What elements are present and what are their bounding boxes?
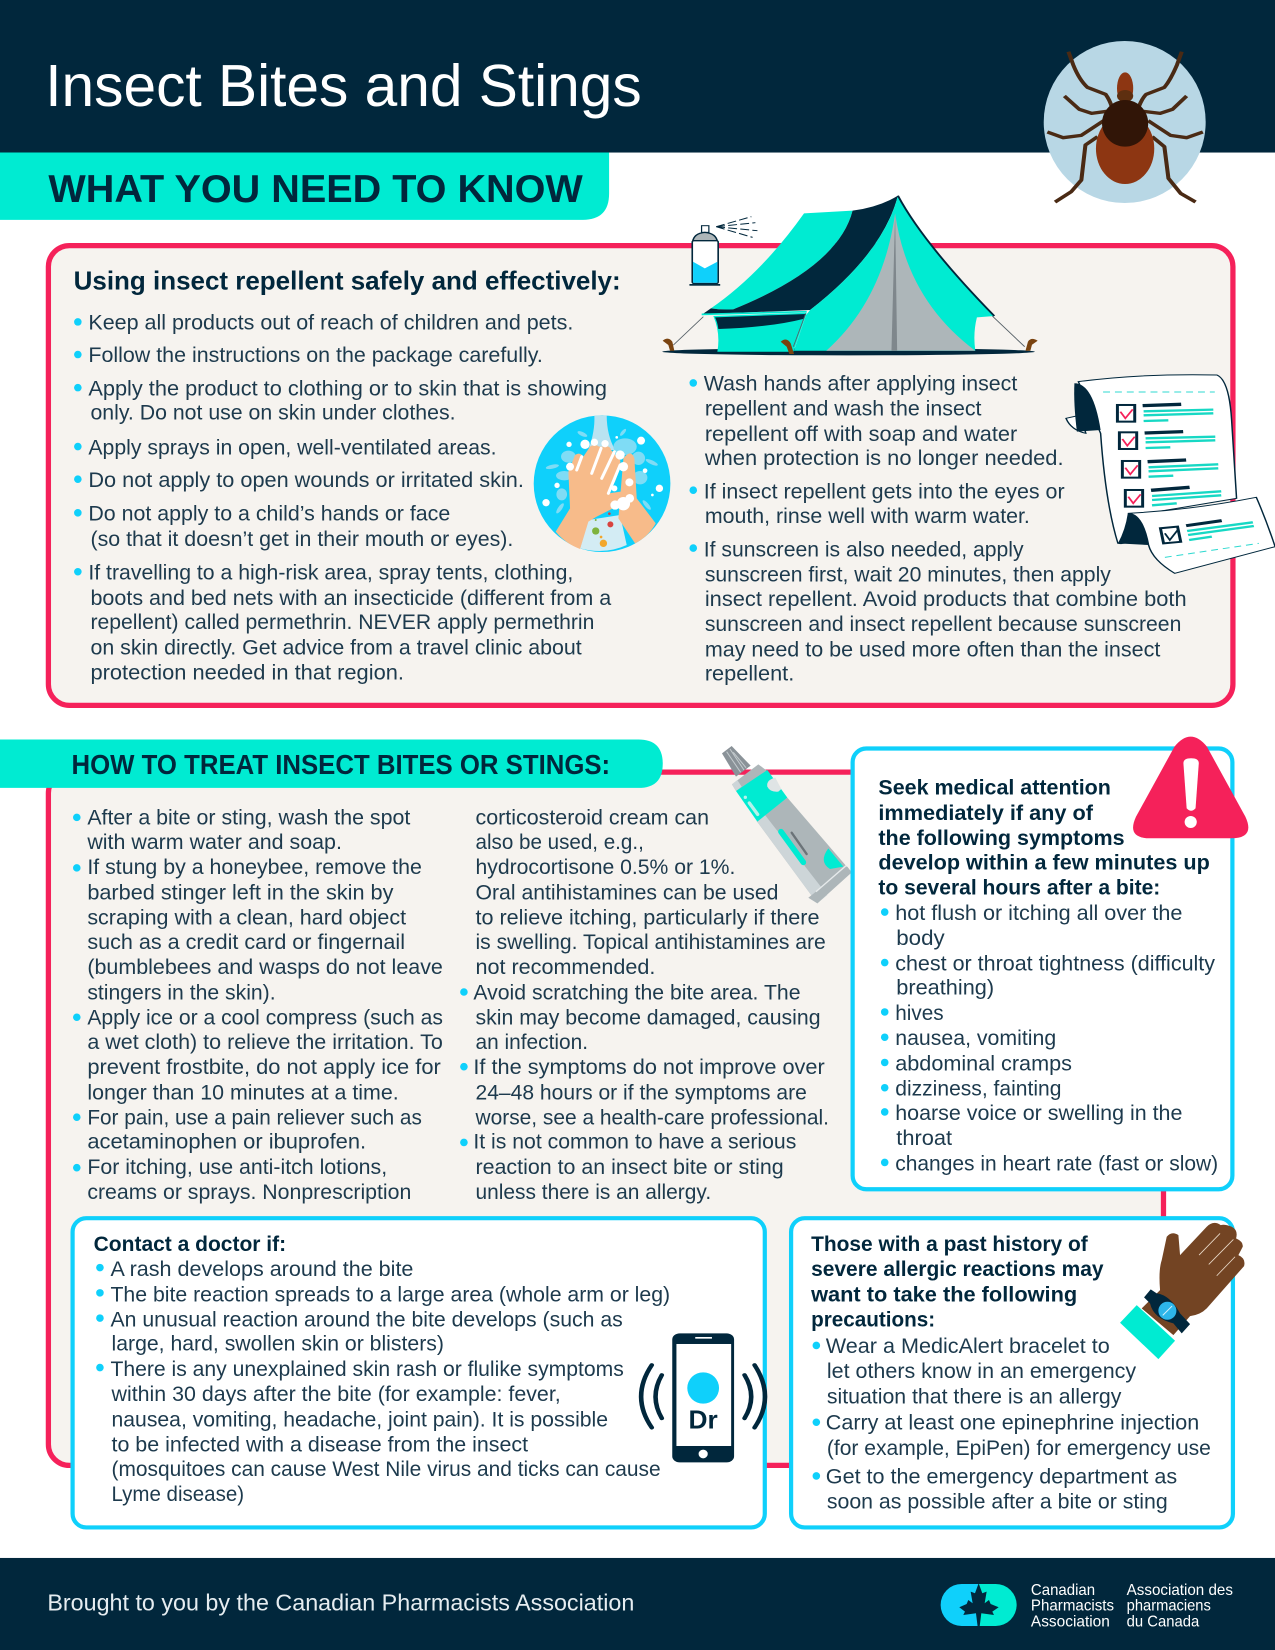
list: treatment left column: For itching, use anti-itch lotions, [87,1154,387,1179]
heading: past history: want to take the following [810,1281,1077,1306]
list: symptoms: breathing) [896,975,994,1000]
list: treatment left column: prevent frostbite, do not apply ice for [87,1054,441,1079]
list: symptoms: hives [895,1000,944,1025]
list: repellent left column: Do not apply to a child’s hands or face [88,501,450,526]
list: treatment left column: Apply ice or a cool compress (such as [87,1005,443,1030]
list: symptoms: nausea, vomiting [895,1025,1056,1050]
list: treatment left column: creams or sprays. Nonprescription [87,1179,411,1204]
list: repellent right column: If insect repellent gets into the eyes or [704,479,1065,504]
list: treatment left column: a wet cloth) to relieve the irritation. To [87,1029,443,1054]
list: repellent right column: mouth, rinse well with warm water. [705,503,1030,528]
icon: spray can [689,217,757,286]
list: treatment right column: not recommended. [475,954,655,979]
list: contact reasons: within 30 days after the bite (for example: fever, [111,1381,561,1406]
list: treatment right column: If the symptoms do not improve over [473,1054,825,1079]
panel: using insect repellent [48,246,1233,705]
panel: contact a doctor [73,1218,765,1527]
logo: Canadian Pharmacists Association: Association [1031,1613,1110,1630]
list: repellent right column: insect repellent. Avoid products that combine both [705,586,1187,611]
list: repellent right column [689,370,1187,686]
list: treatment left column: longer than 10 minutes at a time. [87,1079,399,1104]
list: contact reasons: (mosquitoes can cause West Nile virus and ticks can cause [112,1456,661,1481]
list: repellent left column: Apply the product to clothing or to skin that is showing [88,376,607,401]
heading: contact a doctor: Contact a doctor if: [94,1231,286,1256]
section banner: what you need to know [0,153,609,220]
logo: Canadian Pharmacists Association: Association des [1127,1582,1233,1599]
list: symptoms: changes in heart rate (fast or slow) [895,1150,1218,1175]
list: treatment right column [460,805,829,1204]
list: symptoms: body [896,925,945,950]
list: contact reasons: nausea, vomiting, headache, joint pain). It is possible [112,1406,608,1431]
list: symptoms: chest or throat tightness (difficulty [895,950,1215,975]
list: repellent right column: If sunscreen is also needed, apply [704,536,1024,561]
header banner [0,0,1275,153]
list: contact reasons: A rash develops around the bite [110,1256,413,1281]
list: repellent left column: repellent) called permethrin. NEVER apply permethrin [90,609,594,634]
heading: seek medical attention: develop within a few minutes up [878,849,1210,874]
heading: past history [810,1231,1104,1332]
list: precautions: soon as possible after a bite or sting [827,1489,1168,1514]
list: precautions: Carry at least one epinephrine injection [826,1410,1199,1435]
list: repellent left column: Apply sprays in open, well-ventilated areas. [88,434,497,459]
list: treatment right column: It is not common to have a serious [473,1129,796,1154]
list: repellent left column: Keep all products out of reach of children and pets. [88,309,573,334]
icon: warning triangle [1133,737,1248,838]
list: repellent left column: Do not apply to open wounds or irritated skin. [88,467,524,492]
heading band: how to treat [0,740,663,788]
logo: Canadian Pharmacists Association: pharmaciens [1127,1598,1211,1615]
list: treatment left column: (bumblebees and wasps do not leave [87,954,443,979]
icon: checklist [1066,375,1275,573]
list: precautions [813,1333,1211,1514]
section banner: what you need to know: WHAT YOU NEED TO KNOW [48,168,583,211]
list: repellent right column: sunscreen first, wait 20 minutes, then apply [705,562,1111,587]
heading: seek medical attention: to several hours after a bite: [878,875,1160,900]
list: treatment right column: to relieve itching, particularly if there [475,905,819,930]
list: treatment right column: 24–48 hours or if the symptoms are [475,1079,807,1104]
list: treatment left column: After a bite or sting, wash the spot [87,805,410,830]
list: repellent right column: may need to be used more often than the insect [705,636,1160,661]
panel: how to treat insect bites or stings [0,740,1163,1465]
list: precautions: (for example, EpiPen) for emergency use [827,1435,1211,1460]
logo: Canadian Pharmacists Association: Canadian [1031,1582,1095,1599]
heading: seek medical attention [878,775,1210,900]
list: precautions: Get to the emergency department as [826,1463,1177,1488]
heading: seek medical attention: the following symptoms [878,825,1125,850]
list: treatment left column: acetaminophen or ibuprofen. [87,1129,366,1154]
list: treatment left column: with warm water and soap. [86,829,342,854]
list: repellent left column: If travelling to a high-risk area, spray tents, clothing, [88,560,573,585]
list: contact reasons: Lyme disease) [112,1481,244,1506]
heading: past history: precautions: [811,1307,935,1332]
list: treatment right column: worse, see a health-care professional. [475,1105,829,1130]
icon: ointment tube [722,746,852,903]
heading: past history: Those with a past history of [811,1231,1089,1256]
footer banner [0,1558,1275,1650]
heading: seek medical attention: Seek medical attention [878,775,1111,800]
list: treatment right column: reaction to an insect bite or sting [475,1154,784,1179]
list: repellent left column [74,309,611,685]
list: symptoms [881,900,1218,1175]
list: symptoms: hot flush or itching all over the [895,900,1182,925]
heading: repellent: Using insect repellent safely and effectively: [74,265,621,295]
list: precautions: Wear a MedicAlert bracelet to [826,1333,1110,1358]
list: treatment right column: Oral antihistamines can be used [475,879,778,904]
list: treatment right column: also be used, e.g., [475,829,644,854]
list: treatment right column: unless there is an allergy. [475,1179,711,1204]
list: symptoms: dizziness, fainting [895,1076,1061,1101]
list: contact reasons: There is any unexplained skin rash or flulike symptoms [110,1356,624,1381]
list: treatment right column: Avoid scratching the bite area. The [473,979,801,1004]
list: treatment left column: barbed stinger left in the skin by [87,879,394,904]
list: contact reasons: to be infected with a disease from the insect [112,1432,528,1457]
list: repellent left column: boots and bed nets with an insecticide (different from a [90,585,611,610]
list: contact reasons: large, hard, swollen skin or blisters) [112,1331,444,1356]
list: repellent left column: Follow the instructions on the package carefully. [88,342,543,367]
list: treatment right column: hydrocortisone 0.5% or 1%. [475,854,735,879]
heading: past history: severe allergic reactions may [811,1256,1104,1281]
list: treatment left column: scraping with a clean, hard object [87,905,406,930]
logo: Canadian Pharmacists Association [941,1582,1233,1630]
list: repellent right column: when protection is no longer needed. [704,445,1064,470]
list: repellent left column: on skin directly. Get advice from a travel clinic about [90,634,582,659]
list: symptoms: throat [896,1125,952,1150]
list: treatment right column: corticosteroid cream can [475,805,709,830]
list: treatment left column: If stung by a honeybee, remove the [87,854,422,879]
logo: Canadian Pharmacists Association: du Canada [1127,1613,1200,1630]
list: repellent right column: repellent. [705,661,794,686]
list: repellent right column: Wash hands after applying insect [704,370,1017,395]
panel: seek medical attention [853,748,1232,1189]
list: symptoms: abdominal cramps [895,1050,1072,1075]
list: treatment right column: an infection. [475,1029,588,1054]
list: repellent right column: repellent and wash the insect [705,396,982,421]
list: precautions: let others know in an emergency [827,1358,1136,1383]
list: treatment left column: such as a credit card or fingernail [87,929,405,954]
list: treatment left column: For pain, use a pain reliever such as [87,1105,422,1130]
list: repellent left column: protection needed in that region. [90,660,404,685]
list: contact reasons: The bite reaction spreads to a large area (whole arm or leg) [110,1281,670,1306]
heading: seek medical attention: immediately if any of [878,800,1094,825]
icon: hand washing [534,415,670,552]
icon: phone with Dr [641,1333,765,1462]
title: Insect Bites and Stings [45,54,642,119]
list: treatment right column: is swelling. Topical antihistamines are [475,929,826,954]
list: treatment left column: stingers in the skin). [87,979,276,1004]
list: treatment left column [73,805,443,1204]
footer credit: Brought to you by the Canadian Pharmacists Association [47,1590,634,1616]
icon: tent [662,196,1038,355]
icon: tick [1044,41,1206,203]
icon: hand with medical bracelet [1120,1223,1244,1359]
panel: past history of allergic reactions [791,1218,1233,1527]
list: contact reasons [96,1256,670,1506]
list: treatment right column: skin may become damaged, causing [475,1005,821,1030]
heading band: how to treat: HOW TO TREAT INSECT BITES OR STINGS: [72,749,610,780]
list: repellent right column: repellent off with soap and water [705,421,1017,446]
icon: phone with Dr: Dr [689,1405,718,1435]
list: repellent right column: sunscreen and insect repellent because sunscreen [705,611,1181,636]
list: repellent left column: only. Do not use on skin under clothes. [90,400,456,425]
list: precautions: situation that there is an allergy [827,1383,1122,1408]
list: contact reasons: An unusual reaction around the bite develops (such as [110,1307,623,1332]
logo: Canadian Pharmacists Association: Pharmacists [1031,1598,1114,1615]
list: symptoms: hoarse voice or swelling in the [895,1100,1182,1125]
list: repellent left column: (so that it doesn’t get in their mouth or eyes). [90,526,513,551]
